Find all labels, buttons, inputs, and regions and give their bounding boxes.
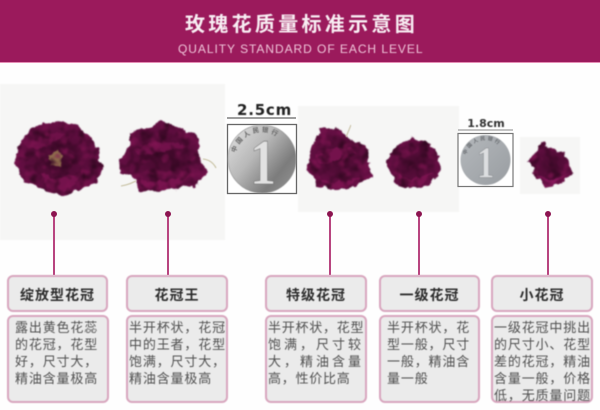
photo background: middle roses [298, 106, 459, 212]
header banner [0, 0, 600, 63]
rose 5 [528, 142, 574, 187]
coin 1.8cm: 中国人民银行 [462, 136, 500, 154]
coin 2.5cm: 2.5cm [237, 101, 292, 119]
rose 3 [307, 127, 372, 190]
coin 1.8cm: 1 [477, 137, 494, 187]
description: 绽放型花冠: 露出黄色花蕊 [15, 320, 98, 335]
description: 绽放型花冠: 好，尺寸大， [15, 354, 98, 369]
rose 3 stem [346, 125, 351, 137]
title: 玫瑰花质量标准示意图 [185, 14, 418, 36]
description: 花冠王: 中的王者，花型 [129, 337, 226, 352]
connector 2 [165, 211, 171, 275]
label: 一级花冠 [379, 275, 480, 312]
description: 绽放型花冠 [7, 315, 109, 403]
description: 绽放型花冠: 的花冠，花型 [15, 337, 98, 352]
label: 绽放型花冠: 绽放型花冠 [20, 287, 95, 303]
description: 小花冠: 一级花冠中挑出 [494, 320, 591, 335]
photo background: left roses [0, 84, 225, 240]
description: 花冠王: 饱满，尺寸大， [129, 354, 226, 369]
description: 小花冠: 含量一般，价格 [494, 371, 591, 386]
description: 一级花冠 [379, 315, 480, 403]
connector 4 [416, 211, 422, 275]
label: 特级花冠 [265, 275, 367, 312]
description: 花冠王: 半开杯状，花冠 [129, 320, 226, 335]
label: 一级花冠: 一级花冠 [400, 287, 460, 303]
description: 一级花冠: 半开杯状，花 [387, 320, 470, 335]
rose 2 [118, 121, 207, 192]
photo background: small rose [520, 137, 580, 194]
connector 5 [545, 211, 551, 275]
subtitle: QUALITY STANDARD OF EACH LEVEL [178, 42, 423, 56]
description: 花冠王: 精油含量极高 [129, 371, 212, 386]
description: 绽放型花冠: 精油含量极高 [15, 371, 98, 386]
description: 特级花冠: 半开杯状，花型 [268, 320, 364, 335]
description: 特级花冠: 大，精油含量 [268, 354, 364, 369]
description: 一级花冠: 一般，精油含 [387, 354, 470, 369]
coin 2.5cm [226, 101, 298, 198]
description: 特级花冠 [265, 315, 367, 403]
description: 小花冠: 的尺寸小、花型 [494, 337, 591, 352]
coin 1.8cm: 1.8cm [467, 117, 505, 130]
label: 花冠王: 花冠王 [154, 287, 200, 303]
label: 小花冠 [491, 275, 593, 312]
description: 小花冠: 低，无质量问题 [494, 388, 591, 403]
description: 特级花冠: 饱满，尺寸较 [268, 337, 364, 352]
coin 2.5cm: 1 [250, 126, 276, 198]
connector 1 [51, 211, 57, 275]
label: 绽放型花冠 [7, 275, 108, 312]
rose 4 [386, 138, 440, 189]
label: 小花冠: 小花冠 [520, 287, 564, 303]
connector 3 [327, 211, 333, 275]
coin 2.5cm: 中国人民银行 [231, 126, 279, 152]
description: 小花冠 [491, 315, 593, 403]
rose 2 stem [121, 159, 216, 186]
coin 1.8cm [457, 117, 514, 188]
description: 花冠王 [126, 315, 228, 403]
description: 一级花冠: 型一般，尺寸 [387, 337, 470, 352]
description: 一级花冠: 量一般 [387, 371, 429, 386]
description: 特级花冠: 高，性价比高 [268, 371, 351, 386]
description: 小花冠: 差的花冠，精油 [494, 354, 591, 369]
label: 特级花冠: 特级花冠 [286, 287, 346, 303]
rose 1 [14, 122, 102, 197]
label: 花冠王 [126, 275, 228, 312]
